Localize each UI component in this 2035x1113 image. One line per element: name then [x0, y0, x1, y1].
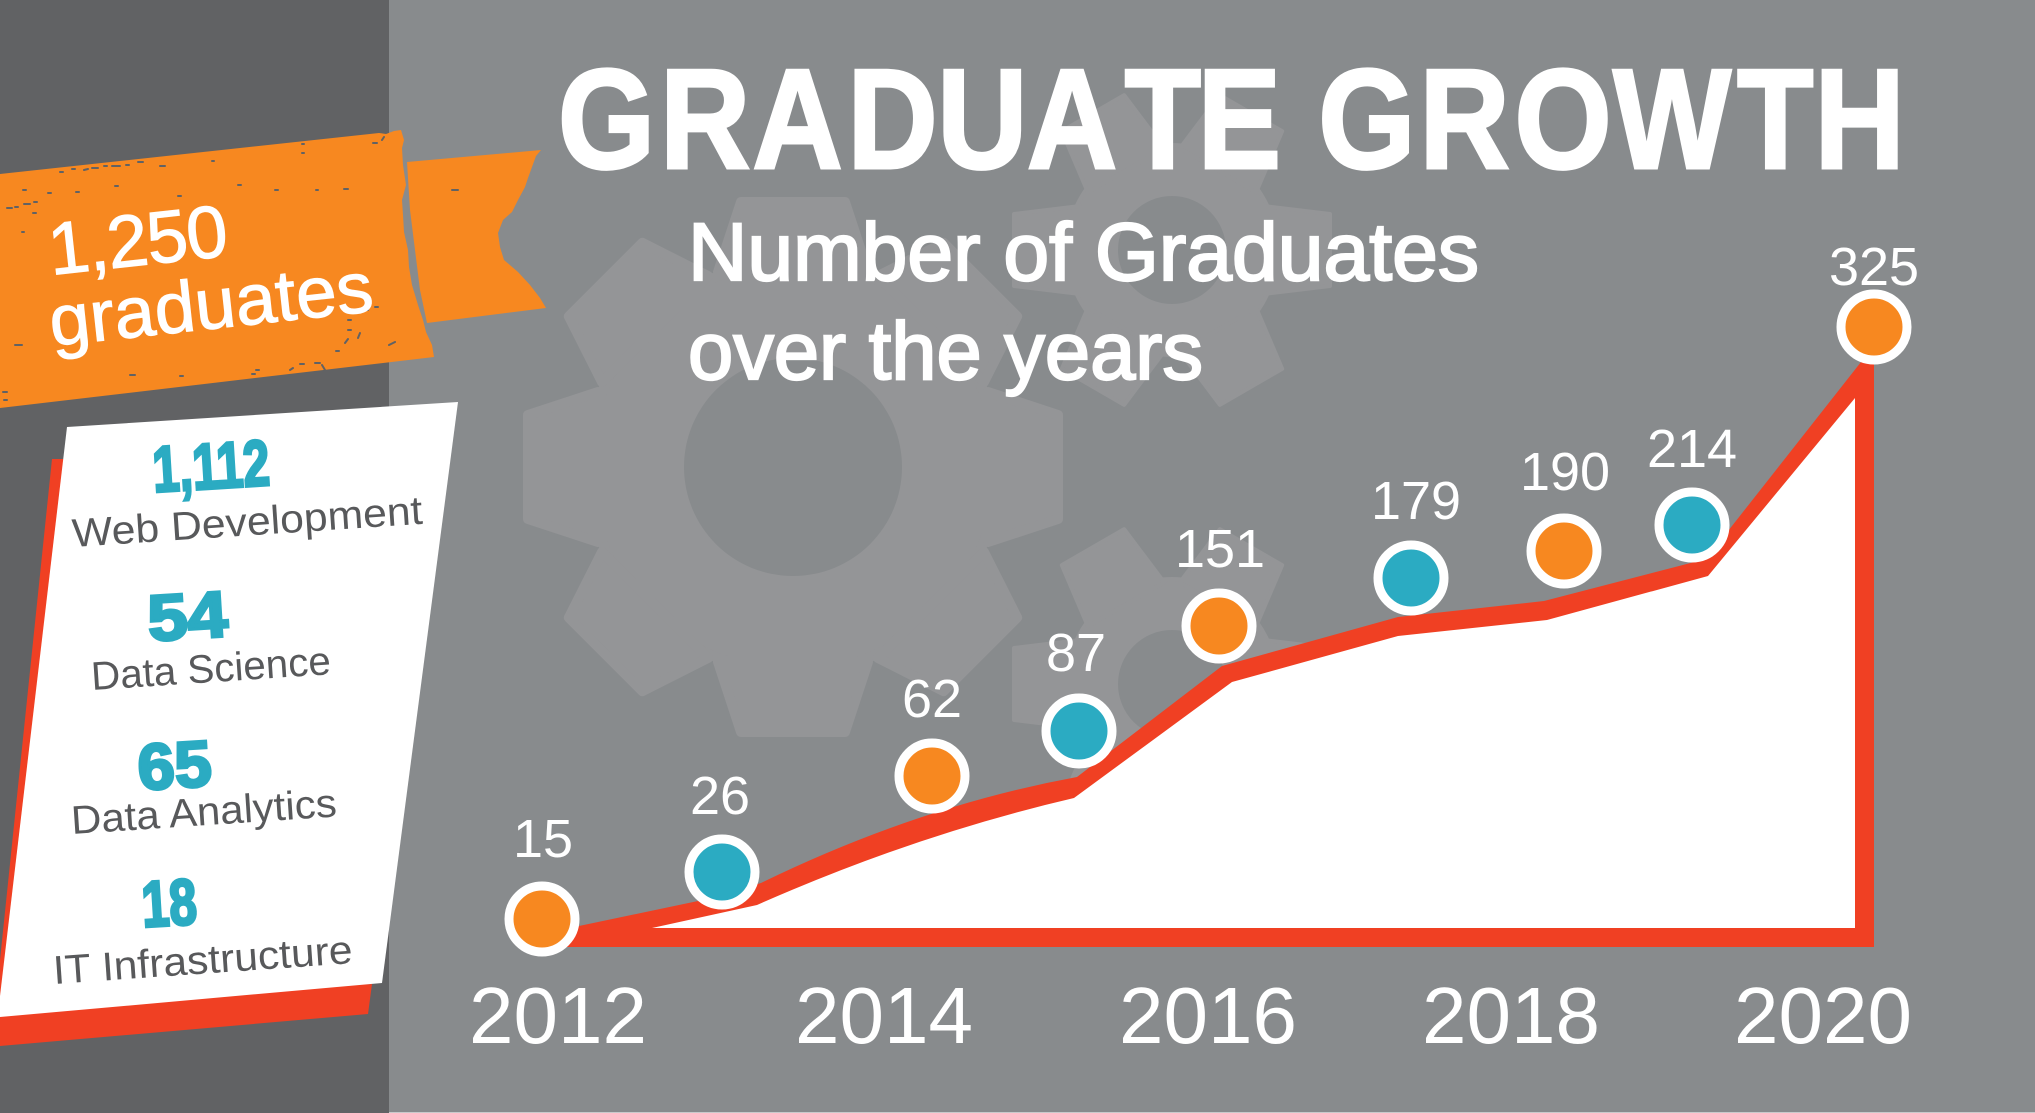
- subtitle: Number of Graduates: [688, 207, 1479, 298]
- point 2018: [1531, 518, 1597, 584]
- panel: specialisation card: [0, 402, 458, 1046]
- subtitle: [688, 207, 1479, 397]
- panel: orange banner: [0, 130, 546, 408]
- stat: data science: 54: [145, 577, 230, 655]
- year axis labels: 2016: [1119, 971, 1297, 1060]
- banner tail: [407, 150, 546, 323]
- year axis labels: 2012: [469, 971, 647, 1060]
- data value labels: 151: [1175, 519, 1265, 579]
- stat: data science: [90, 577, 332, 699]
- data value labels: 15: [513, 809, 573, 869]
- chart: graduates per year area chart: [469, 237, 1919, 1060]
- stat: web development: [71, 426, 424, 556]
- stat: data science: Data Science: [90, 639, 332, 699]
- stat: it infrastructure: 18: [139, 865, 199, 941]
- point 2016: [1186, 593, 1252, 659]
- stat: it infrastructure: IT Infrastructure: [52, 928, 354, 993]
- point 2015: [1046, 698, 1112, 764]
- card white sheet: [0, 402, 458, 1017]
- point 2020: [1841, 294, 1907, 360]
- data value labels: 87: [1046, 623, 1106, 683]
- stat: web development: 1,112: [150, 426, 272, 506]
- stat: it infrastructure: [52, 865, 354, 993]
- left dark column: [0, 0, 389, 1113]
- stat: data analytics: Data Analytics: [70, 781, 338, 843]
- icon: large gear: [528, 202, 1058, 732]
- year axis labels: 2014: [795, 971, 973, 1060]
- banner distress marks: [3, 137, 458, 400]
- stat: data analytics: [70, 727, 338, 843]
- point 2013: [689, 839, 755, 905]
- background gears: [528, 91, 1330, 843]
- data value labels: 62: [902, 669, 962, 729]
- banner body: [0, 130, 434, 408]
- year axis labels: 2020: [1734, 971, 1912, 1060]
- stat: data analytics: 65: [135, 727, 214, 804]
- data value labels: 26: [690, 766, 750, 826]
- data value labels: 190: [1520, 442, 1610, 502]
- data value labels: 179: [1371, 471, 1461, 531]
- icon: upper small gear: [1014, 91, 1330, 409]
- banner label text: graduates: [45, 247, 377, 362]
- data points: [509, 294, 1907, 952]
- year axis labels: 2018: [1422, 971, 1600, 1060]
- point 2019: [1659, 492, 1725, 558]
- title: GRADUATE GROWTH: [558, 41, 1905, 199]
- subtitle: over the years: [688, 306, 1203, 397]
- point 2012: [509, 886, 575, 952]
- year axis labels: [469, 971, 1912, 1060]
- chart red outline: [560, 340, 1874, 947]
- data value labels: 325: [1829, 237, 1919, 297]
- icon: lower small gear: [1014, 525, 1330, 843]
- chart white area: [652, 398, 1855, 928]
- card red shadow: [0, 459, 372, 1046]
- data value labels: 214: [1647, 419, 1737, 479]
- point 2014: [899, 743, 965, 809]
- banner total text: 1,250: [44, 189, 232, 291]
- data value labels: [513, 237, 1919, 869]
- stat: web development: Web Development: [71, 489, 424, 556]
- point 2017: [1378, 545, 1444, 611]
